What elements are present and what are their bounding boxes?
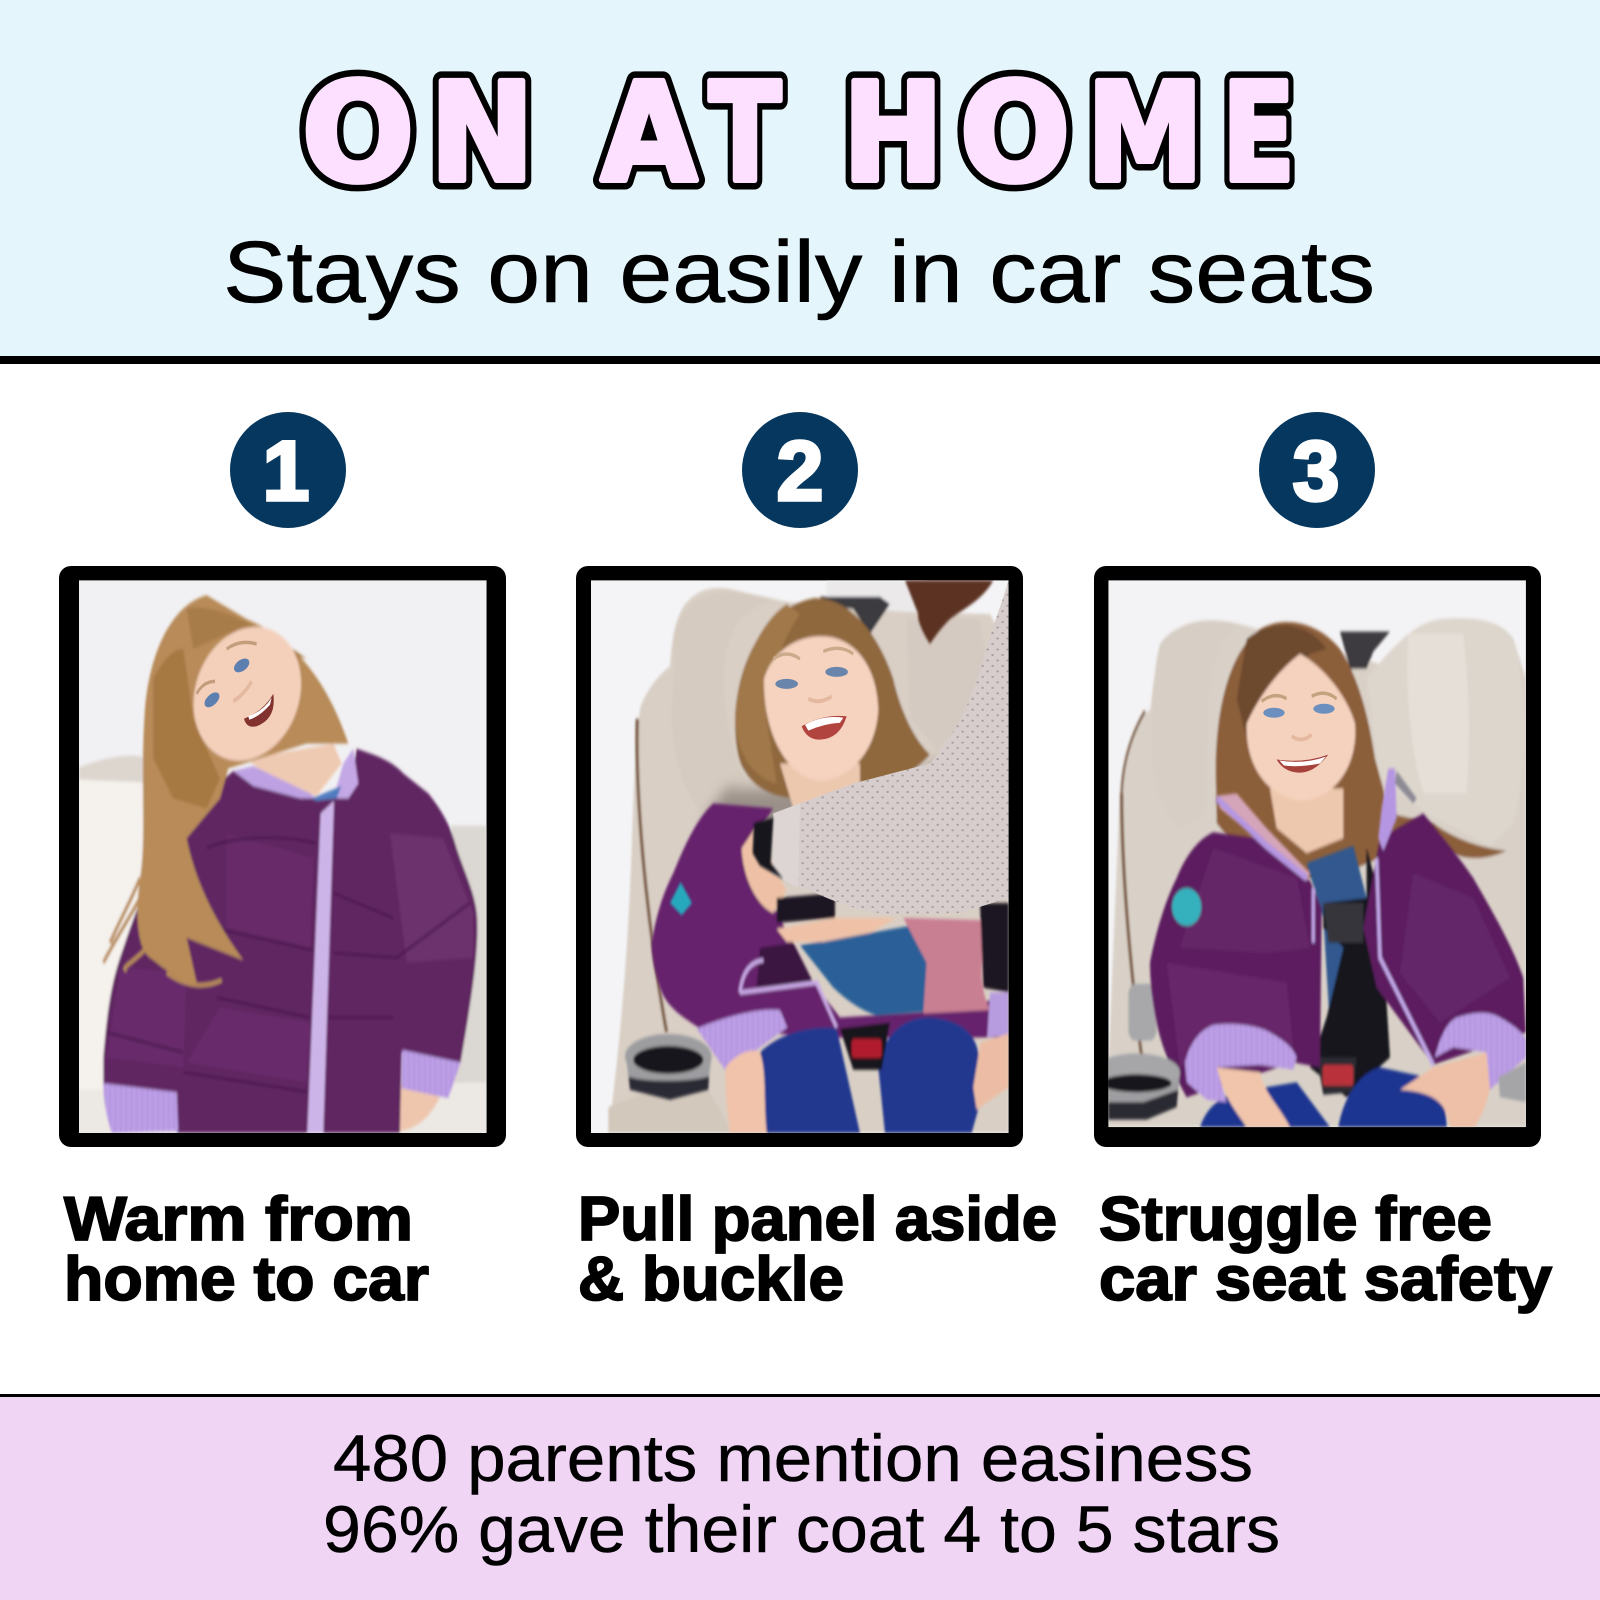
caption: step 3: car seat safety xyxy=(1099,1245,1553,1314)
panel: header band xyxy=(0,0,1600,364)
jacket left xyxy=(1150,832,1322,1097)
footer statistics text: 96% gave their coat 4 to 5 stars xyxy=(323,1492,1280,1566)
jacket xyxy=(652,803,1009,1037)
left cuff xyxy=(103,1083,178,1133)
neck xyxy=(780,764,860,808)
mother hands xyxy=(742,828,787,913)
title: O xyxy=(302,55,414,213)
footer statistics text xyxy=(323,1421,1280,1566)
title xyxy=(302,55,1295,213)
jacket right xyxy=(1363,813,1526,1065)
caption: step 3 xyxy=(1099,1185,1553,1314)
face xyxy=(764,636,878,781)
collar xyxy=(233,766,317,798)
pants xyxy=(1200,1082,1330,1127)
cup holders xyxy=(1108,1070,1180,1120)
cuffs xyxy=(697,1010,787,1072)
logo xyxy=(670,882,692,915)
panel: photo 3, child buckled in car seat xyxy=(1093,566,1541,1147)
cuffs xyxy=(1185,1024,1297,1102)
title: M xyxy=(1087,55,1203,213)
title: N xyxy=(430,55,534,213)
footer statistics text: 480 parents mention easiness xyxy=(333,1421,1253,1495)
watch xyxy=(753,817,783,879)
title: O xyxy=(960,55,1070,213)
neck xyxy=(247,744,342,796)
title: E xyxy=(1222,55,1295,213)
cup holder xyxy=(627,1057,710,1100)
caption: step 3: Struggle free xyxy=(1099,1185,1492,1254)
mother hair xyxy=(905,580,993,644)
caption: step 1: home to car xyxy=(64,1245,429,1314)
hands xyxy=(1217,1067,1290,1127)
step number 1 xyxy=(230,412,346,528)
hair strands xyxy=(103,878,222,985)
pink lining xyxy=(903,918,990,1014)
subtitle: Stays on easily in car seats xyxy=(223,224,1375,321)
neck xyxy=(1270,788,1343,853)
step number 1: 1 xyxy=(263,424,309,518)
caption: step 2 xyxy=(578,1185,1057,1314)
title: E xyxy=(1222,55,1295,213)
child hair xyxy=(1216,622,1507,878)
child hands xyxy=(726,1051,767,1133)
step number 3 xyxy=(1259,412,1375,528)
harness xyxy=(1310,848,1390,1097)
caption: step 2: Pull panel aside xyxy=(578,1185,1057,1254)
panel: footer band xyxy=(0,1394,1600,1600)
title: H xyxy=(843,55,943,213)
car seat xyxy=(608,588,1009,1133)
face xyxy=(192,624,302,764)
jacket xyxy=(103,749,477,1133)
title: H xyxy=(843,55,943,213)
shadow behind child xyxy=(700,759,943,823)
title: O xyxy=(960,55,1070,213)
title: M xyxy=(1087,55,1203,213)
blue shirt xyxy=(800,923,927,1016)
child hair xyxy=(735,598,930,798)
caption: step 2: & buckle xyxy=(578,1245,844,1314)
step number 2 xyxy=(742,412,858,528)
pants xyxy=(760,1028,860,1133)
panel: photo 1, child in purple coat xyxy=(59,566,506,1147)
title: A xyxy=(601,55,697,213)
title: N xyxy=(430,55,534,213)
sweater xyxy=(772,580,1009,914)
step number 3: 3 xyxy=(1293,424,1339,518)
right cuff xyxy=(402,1050,461,1098)
zipper xyxy=(307,801,334,1133)
teal logo xyxy=(1172,888,1201,926)
face xyxy=(1247,654,1355,801)
caption: step 1: Warm from xyxy=(64,1185,413,1254)
title: O xyxy=(302,55,414,213)
hair xyxy=(137,595,348,983)
title: A xyxy=(601,55,697,213)
panel: photo 2, buckling the car seat xyxy=(576,566,1023,1147)
shirt xyxy=(1307,846,1367,1027)
title: T xyxy=(709,55,781,213)
step number 2: 2 xyxy=(777,424,823,518)
title: T xyxy=(709,55,781,213)
seat buckle xyxy=(840,1022,890,1070)
caption: step 1 xyxy=(64,1185,429,1314)
collar and zipper xyxy=(1216,793,1310,881)
car seat xyxy=(1108,618,1526,1127)
